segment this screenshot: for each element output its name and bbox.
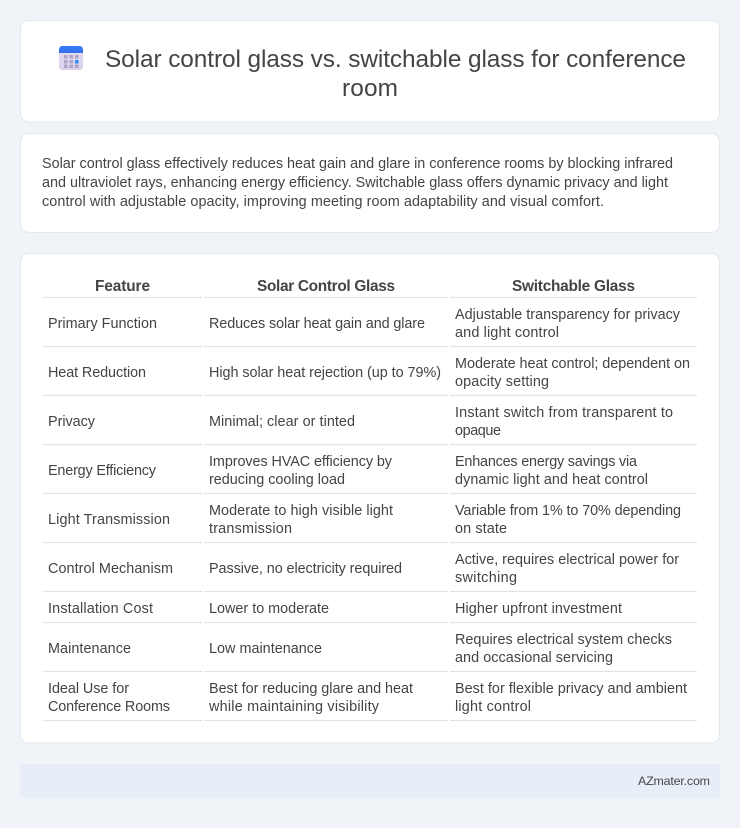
row: installation cost: Installation Cost <box>48 601 153 617</box>
row: control mechanism: Control Mechanism <box>48 561 173 577</box>
title <box>105 46 686 102</box>
panel: title card <box>20 20 720 122</box>
row: energy efficiency: Energy Efficiency <box>48 463 157 479</box>
row: heat reduction <box>43 356 697 396</box>
footer bar: AZmater.com <box>638 774 710 788</box>
table header <box>43 278 697 298</box>
row: light transmission: transmission <box>209 521 292 537</box>
row: light transmission: Light Transmission <box>48 512 170 528</box>
row: installation cost <box>43 601 697 622</box>
row: light transmission: Variable from 1% to 70% depending <box>455 503 681 519</box>
icon: calendar grid <box>59 46 83 70</box>
row: maintenance: Requires electrical system checks <box>455 632 672 648</box>
row: maintenance <box>43 632 697 672</box>
footer bar <box>20 764 720 798</box>
row: control mechanism: Passive, no electricity required <box>209 561 402 577</box>
row: control mechanism: switching <box>455 570 517 586</box>
row: energy efficiency: dynamic light and heat control <box>455 472 648 488</box>
panel: intro text: control with adjustable opacity, improving meeting room adaptability and visual comfort. <box>42 194 604 210</box>
row: privacy: opaque <box>455 423 501 439</box>
row: maintenance: Low maintenance <box>209 641 322 657</box>
table header: Solar Control Glass <box>257 278 395 295</box>
row: energy efficiency <box>43 454 697 494</box>
row: heat reduction: Moderate heat control; dependent on <box>455 356 690 372</box>
row: primary function: Reduces solar heat gain and glare <box>209 316 425 332</box>
table header: Feature <box>95 278 150 295</box>
row: heat reduction: High solar heat rejection (up to 79%) <box>209 365 441 381</box>
row: light transmission: Moderate to high visible light <box>209 503 393 519</box>
row: ideal use <box>43 681 697 720</box>
row: control mechanism <box>43 552 697 592</box>
row: heat reduction: opacity setting <box>455 374 549 390</box>
row: energy efficiency: Enhances energy savings via <box>455 454 637 470</box>
row: energy efficiency: Improves HVAC efficiency by <box>209 454 393 470</box>
row: privacy: Instant switch from transparent to <box>455 405 673 421</box>
row: energy efficiency: reducing cooling load <box>209 472 345 488</box>
row: ideal use: light control <box>455 699 531 715</box>
title: room <box>342 75 398 102</box>
row: maintenance: and occasional servicing <box>455 650 613 666</box>
row: ideal use: Conference Rooms <box>48 699 170 715</box>
row: ideal use: Best for reducing glare and heat <box>209 681 413 697</box>
row: primary function <box>43 307 697 346</box>
panel: intro text: Solar control glass effectively reduces heat gain and glare in conference rooms by blocking infrared <box>42 156 673 172</box>
title: Solar control glass vs. switchable glass for conference <box>105 46 686 73</box>
row: ideal use: while maintaining visibility <box>208 699 380 715</box>
row: privacy <box>43 405 697 444</box>
row: heat reduction: Heat Reduction <box>48 365 146 381</box>
row: ideal use: Ideal Use for <box>48 681 129 697</box>
row: privacy: Privacy <box>48 414 96 430</box>
row: primary function: Adjustable transparency for privacy <box>455 307 681 323</box>
table header: Switchable Glass <box>512 278 635 295</box>
row: installation cost: Lower to moderate <box>209 601 329 617</box>
row: privacy: Minimal; clear or tinted <box>209 414 355 430</box>
panel: intro text: and ultraviolet rays, enhancing energy efficiency. Switchable glass offers dynamic privacy and light <box>42 175 668 191</box>
row: primary function: and light control <box>455 325 559 341</box>
row: maintenance: Maintenance <box>48 641 131 657</box>
row: light transmission <box>43 503 697 542</box>
row: primary function: Primary Function <box>48 316 157 332</box>
row: installation cost: Higher upfront investment <box>455 601 622 617</box>
row: light transmission: on state <box>455 521 507 537</box>
panel: intro text <box>20 134 720 232</box>
row: control mechanism: Active, requires electrical power for <box>455 552 679 568</box>
row: ideal use: Best for flexible privacy and ambient <box>455 681 687 697</box>
panel: comparison table <box>20 254 720 743</box>
